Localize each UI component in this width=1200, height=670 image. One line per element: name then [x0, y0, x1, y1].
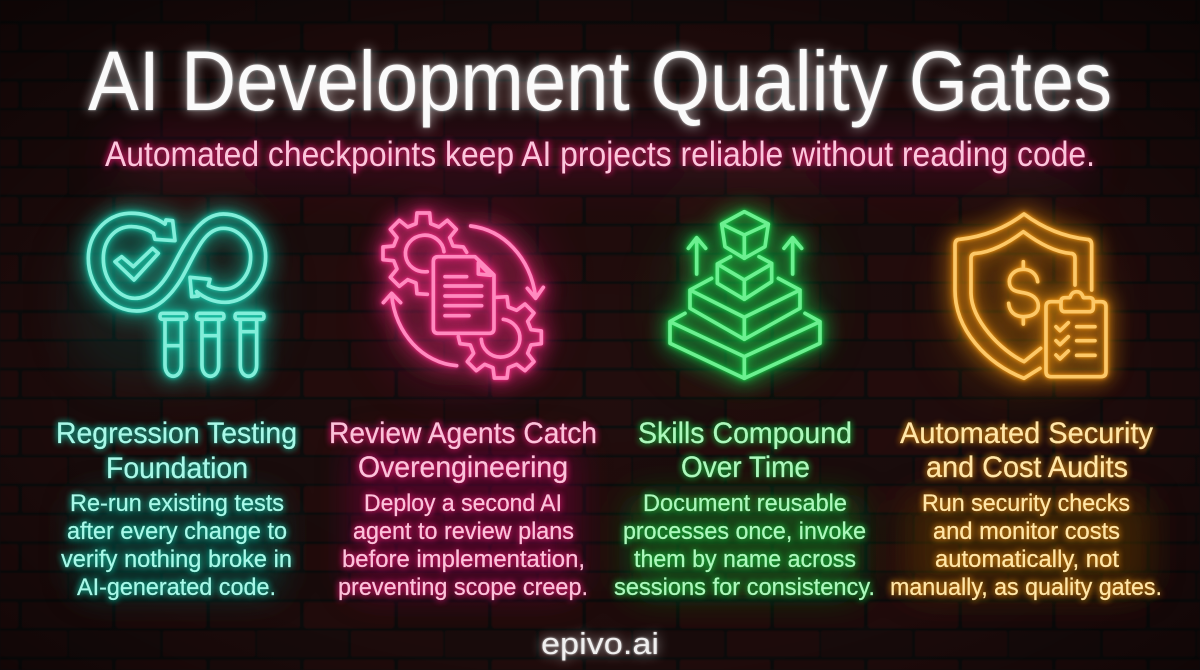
panel: security and cost audits	[890, 214, 1162, 601]
footer: brand: epivo.ai	[541, 626, 659, 661]
text: security audits description: Run security checks	[922, 490, 1130, 517]
heading: regression testing foundation: Foundation	[106, 452, 248, 485]
heading: automated security and cost audits: Automated Security	[900, 417, 1153, 450]
icon: stacked pyramid with up arrows	[670, 212, 820, 378]
text: security audits description: manually, as quality gates.	[890, 574, 1162, 601]
text: skills compound description: Document reusable	[643, 490, 847, 517]
heading: review agents catch overengineering	[329, 417, 597, 484]
icon: gears with document and cycle arrows	[383, 213, 543, 378]
icon: shield with dollar sign and clipboard	[955, 214, 1106, 378]
icon: infinity loop with check and test tubes	[88, 213, 266, 376]
text: skills compound description: them by name across	[634, 546, 856, 573]
text: review agents description: preventing scope creep.	[338, 574, 588, 601]
text: security audits description: automatically, not	[935, 546, 1119, 573]
heading: skills compound over time: Over Time	[681, 451, 810, 484]
text: review agents description: agent to review plans	[353, 518, 574, 545]
heading: regression testing foundation	[56, 417, 297, 485]
heading: skills compound over time: Skills Compound	[638, 417, 852, 450]
text: regression testing description: Re-run existing tests	[70, 490, 284, 517]
heading: review agents catch overengineering: Review Agents Catch	[329, 417, 597, 450]
text: regression testing description	[61, 490, 292, 601]
panel: skills compound	[614, 212, 875, 601]
text: review agents description: Deploy a second AI	[364, 490, 562, 517]
heading: skills compound over time	[638, 417, 852, 484]
heading: regression testing foundation: Regression Testing	[56, 417, 297, 450]
heading: automated security and cost audits: and Cost Audits	[926, 451, 1128, 484]
panel: review agents	[329, 213, 597, 601]
text: review agents description	[338, 490, 588, 601]
text: regression testing description: after every change to	[67, 518, 287, 545]
text: skills compound description	[614, 490, 875, 601]
text: regression testing description: verify nothing broke in	[61, 546, 292, 573]
text: skills compound description: processes once, invoke	[623, 518, 866, 545]
heading: review agents catch overengineering: Overengineering	[358, 451, 568, 484]
text: security audits description	[890, 490, 1162, 601]
text: review agents description: before implementation,	[342, 546, 585, 573]
subtitle: Automated checkpoints keep AI projects reliable without reading code.	[105, 135, 1095, 174]
heading: automated security and cost audits	[900, 417, 1153, 484]
panel: regression testing	[56, 213, 297, 601]
text: skills compound description: sessions for consistency.	[614, 574, 875, 601]
title: AI Development Quality Gates	[88, 34, 1112, 128]
text: regression testing description: AI-generated code.	[77, 574, 276, 601]
text: security audits description: and monitor costs	[933, 518, 1120, 545]
